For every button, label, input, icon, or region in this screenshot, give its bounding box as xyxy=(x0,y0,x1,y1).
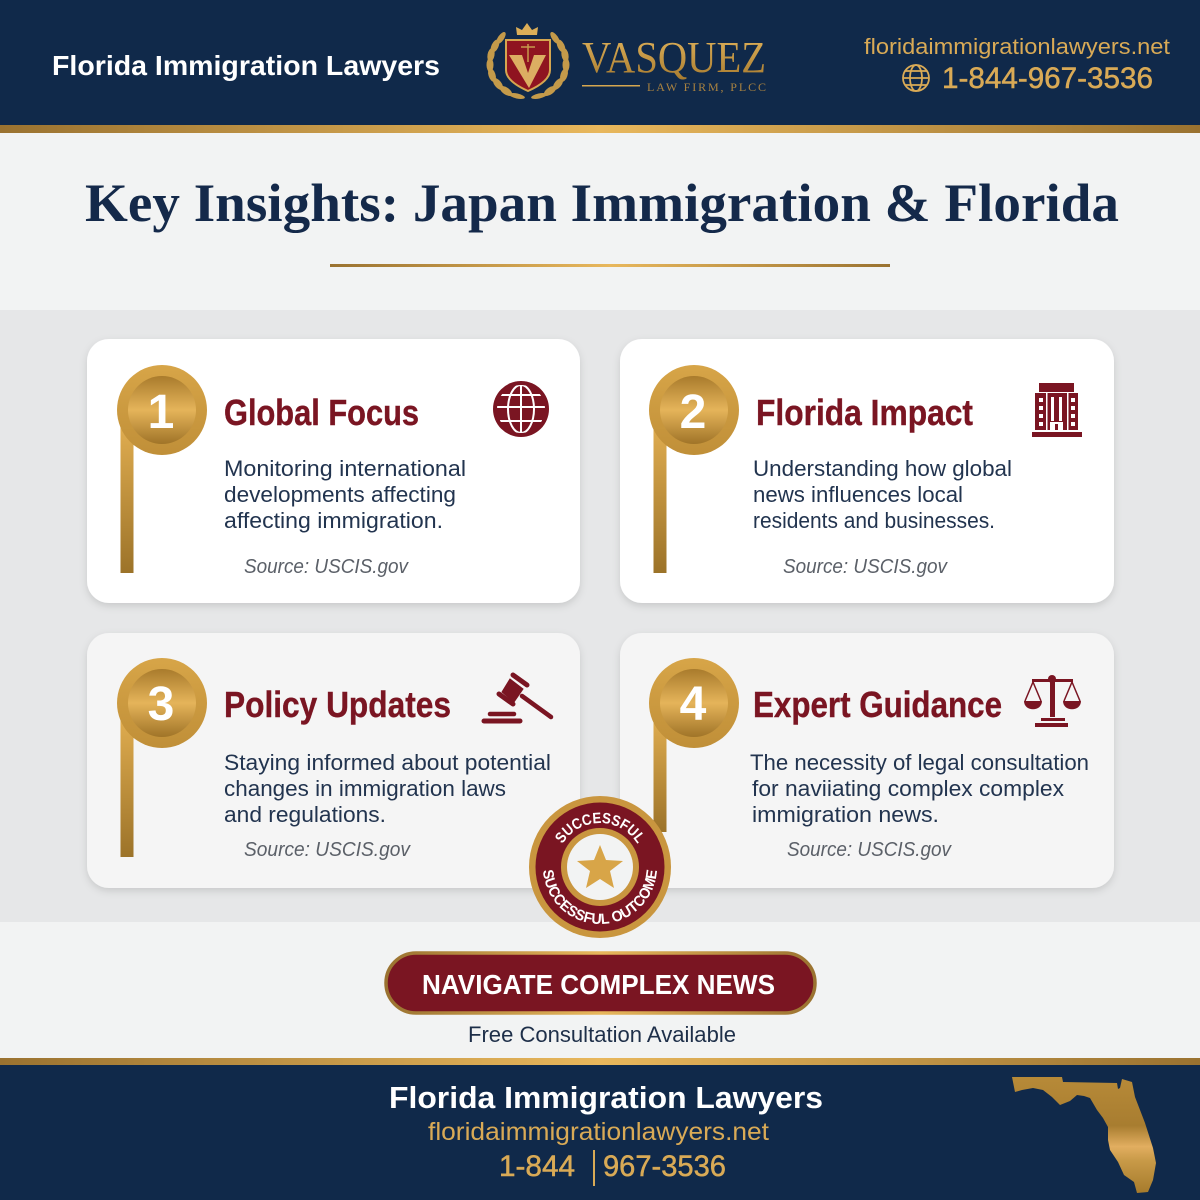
card 1 source: Source: USCIS.gov xyxy=(244,556,409,578)
card 4 heading: Expert Guidance xyxy=(753,684,1002,725)
card 2 description: Understanding how global xyxy=(753,456,1012,481)
number badge 1: 1 xyxy=(148,386,174,439)
consultation note: Free Consultation Available xyxy=(468,1022,736,1047)
footer phone: 1-844 xyxy=(499,1150,575,1183)
card 2 description: news influences local xyxy=(753,482,963,507)
icon: laurel wreath xyxy=(486,31,570,100)
footer firm name: Florida Immigration Lawyers xyxy=(389,1080,823,1115)
number badge 2: 2 xyxy=(680,386,706,439)
card 1 heading: Global Focus xyxy=(224,392,419,433)
badge star xyxy=(577,845,623,888)
panel: card 4 Expert Guidance xyxy=(620,633,1114,888)
number stem 3 xyxy=(120,717,134,857)
call to action button xyxy=(386,953,815,1013)
icon: Florida map xyxy=(1012,1077,1156,1193)
card 4 description xyxy=(750,750,1089,827)
card 4 description: for naviiating complex complex xyxy=(752,776,1064,801)
card 3 description: Staying informed about potential xyxy=(224,750,551,775)
panel: card 2 Florida Impact xyxy=(620,339,1114,603)
icon: crown xyxy=(516,23,538,35)
card 2 description xyxy=(753,456,1012,533)
main title: Key Insights: Japan Immigration & Florida xyxy=(85,173,1119,233)
footer phone xyxy=(499,1150,726,1186)
card 1 description xyxy=(224,456,466,533)
footer website: floridaimmigrationlawyers.net xyxy=(428,1118,769,1146)
card 3 description: changes in immigration laws xyxy=(224,776,506,801)
number stem 4 xyxy=(654,717,666,832)
card 1 description: affecting immigration. xyxy=(224,508,443,533)
icon: building xyxy=(1032,383,1082,437)
icon: globe xyxy=(493,379,549,439)
panel: card 1 Global Focus xyxy=(87,339,580,603)
icon: shield xyxy=(506,40,550,91)
header phone: 1-844-967-3536 xyxy=(942,62,1153,95)
number stem 1 xyxy=(120,425,134,573)
card 2 description: residents and businesses. xyxy=(753,508,995,533)
icon: header globe xyxy=(903,65,929,91)
card 1 description: developments affecting xyxy=(224,482,456,507)
logo subtitle: LAW FIRM, PLCC xyxy=(647,80,766,94)
card 1 description: Monitoring international xyxy=(224,456,466,481)
icon: gavel xyxy=(484,675,551,721)
badge: successful outcome xyxy=(529,796,671,938)
card 3 heading: Policy Updates xyxy=(224,684,451,725)
number badge 4: 4 xyxy=(680,678,707,731)
badge top text: SUCCESSFUL xyxy=(556,812,643,844)
number badge 1 xyxy=(117,365,207,455)
title underline xyxy=(330,264,890,267)
number badge 3: 3 xyxy=(148,678,174,731)
footer bar xyxy=(0,1058,1200,1200)
card 3 source: Source: USCIS.gov xyxy=(244,839,411,861)
card 4 description: The necessity of legal consultation xyxy=(750,750,1089,775)
logo: Vasquez Law Firm xyxy=(486,23,766,100)
card 3 description xyxy=(224,750,551,827)
badge bottom text: SUCCESSFUL OUTCOME xyxy=(543,870,657,924)
number badge 4 xyxy=(649,658,739,748)
card 4 description: immigration news. xyxy=(752,802,939,827)
footer phone: 967-3536 xyxy=(603,1150,726,1183)
card 2 heading: Florida Impact xyxy=(756,392,973,433)
panel: card 3 Policy Updates xyxy=(87,633,580,888)
number badge 2 xyxy=(649,365,739,455)
call to action button: NAVIGATE COMPLEX NEWS xyxy=(422,969,775,1000)
card 4 source: Source: USCIS.gov xyxy=(787,839,952,861)
card 2 source: Source: USCIS.gov xyxy=(783,556,948,578)
header website: floridaimmigrationlawyers.net xyxy=(864,34,1170,59)
card 3 description: and regulations. xyxy=(224,802,386,827)
header firm name: Florida Immigration Lawyers xyxy=(52,50,440,81)
logo wordmark: VASQUEZ xyxy=(582,33,766,82)
number badge 3 xyxy=(117,658,207,748)
number stem 2 xyxy=(654,425,666,573)
icon: scales xyxy=(1024,675,1081,727)
logo rule xyxy=(582,85,640,86)
header bar xyxy=(0,0,1200,133)
